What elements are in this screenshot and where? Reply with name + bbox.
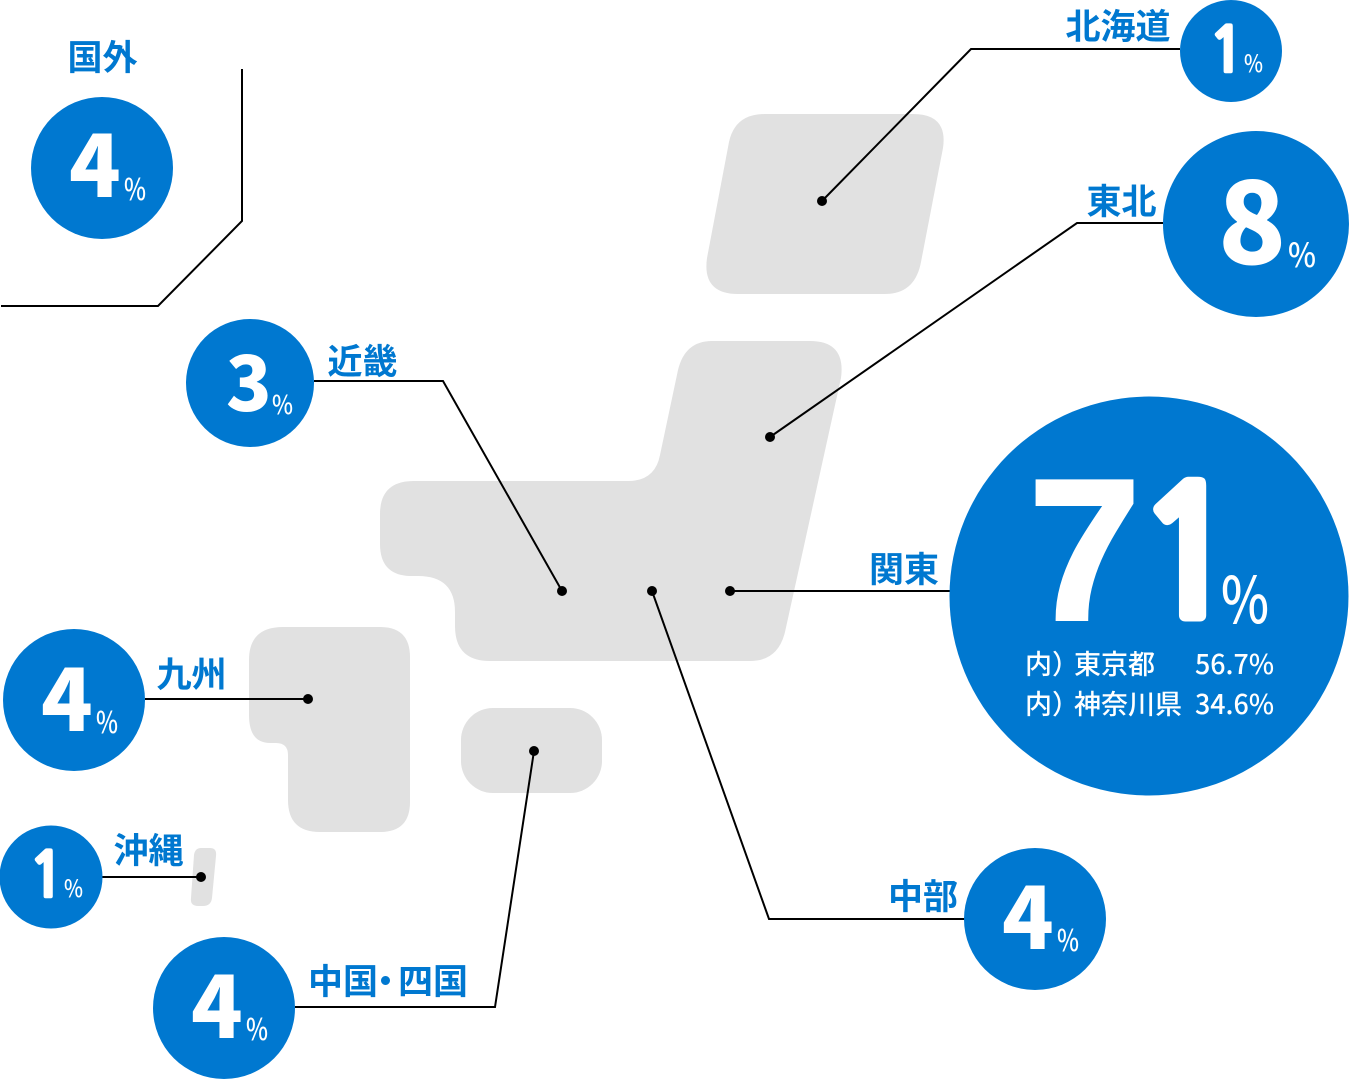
region: Okinawa: [0, 826, 206, 928]
region: Kanto: 56.7%: [1195, 643, 1274, 682]
region: Chugoku and Shikoku: [153, 746, 539, 1079]
region: Kanto: 1: [1134, 466, 1243, 644]
region: Kanto: 関東: [869, 551, 939, 590]
map of Japan: [191, 114, 944, 906]
map region: Okinawa: [191, 848, 216, 906]
region: Chubu: %: [1057, 916, 1079, 960]
region: Kinki: 近畿: [328, 343, 398, 382]
region: Kanto: 内）: [1025, 683, 1079, 722]
region: Kyushu: %: [96, 698, 118, 742]
region: Tohoku: [765, 131, 1349, 442]
region: Chugoku and Shikoku: %: [246, 1005, 268, 1049]
region: overseas: [31, 39, 173, 239]
region: Kyushu: 4: [41, 633, 93, 756]
region: Okinawa: 1: [28, 846, 66, 907]
region: Tohoku: 東北: [1086, 183, 1157, 222]
region: Chugoku and Shikoku: ・: [368, 963, 403, 1002]
region: Okinawa: 沖縄: [114, 832, 184, 871]
map region: Hokkaido: [706, 114, 944, 294]
overseas divider line: [1, 69, 242, 306]
region: Kinki: [186, 319, 567, 596]
region: Chugoku and Shikoku: 4: [191, 940, 243, 1063]
region: Kinki: %: [272, 385, 293, 422]
map region: Shikoku: [461, 708, 602, 793]
map region: Honshu: [380, 341, 842, 661]
region: Chugoku and Shikoku: 四国: [398, 963, 468, 1002]
region: Hokkaido: %: [1244, 44, 1263, 79]
region: Kanto: 内）: [1025, 643, 1079, 682]
region: Kanto: %: [1221, 550, 1269, 642]
region: Kanto: 7: [1029, 439, 1140, 662]
region: Kinki: 3: [226, 324, 272, 433]
region: Chubu: 4: [1002, 851, 1054, 974]
map region: Kyushu: [249, 627, 410, 832]
region: Hokkaido: [817, 0, 1282, 206]
region: Kanto: 34.6%: [1195, 683, 1274, 722]
region: Hokkaido: 1: [1208, 21, 1246, 82]
region: Okinawa: %: [64, 869, 83, 904]
region: Kyushu: 九州: [156, 656, 227, 695]
region: overseas: 国外: [68, 39, 138, 78]
region: Tohoku: %: [1288, 229, 1316, 277]
region: Kanto: [725, 396, 1348, 796]
region: Tohoku: 8: [1218, 135, 1286, 297]
region: overseas: 4: [69, 99, 121, 222]
region: Kanto: 神奈川県: [1074, 683, 1182, 722]
region: Hokkaido: 北海道: [1066, 8, 1171, 47]
region: Chugoku and Shikoku: 中国: [308, 963, 378, 1002]
region: Chubu: 中部: [888, 878, 958, 917]
region: Chubu: [647, 586, 1106, 990]
region: Kyushu: [3, 629, 313, 771]
region: Kanto: 東京都: [1074, 643, 1155, 682]
region: overseas: %: [124, 165, 146, 209]
